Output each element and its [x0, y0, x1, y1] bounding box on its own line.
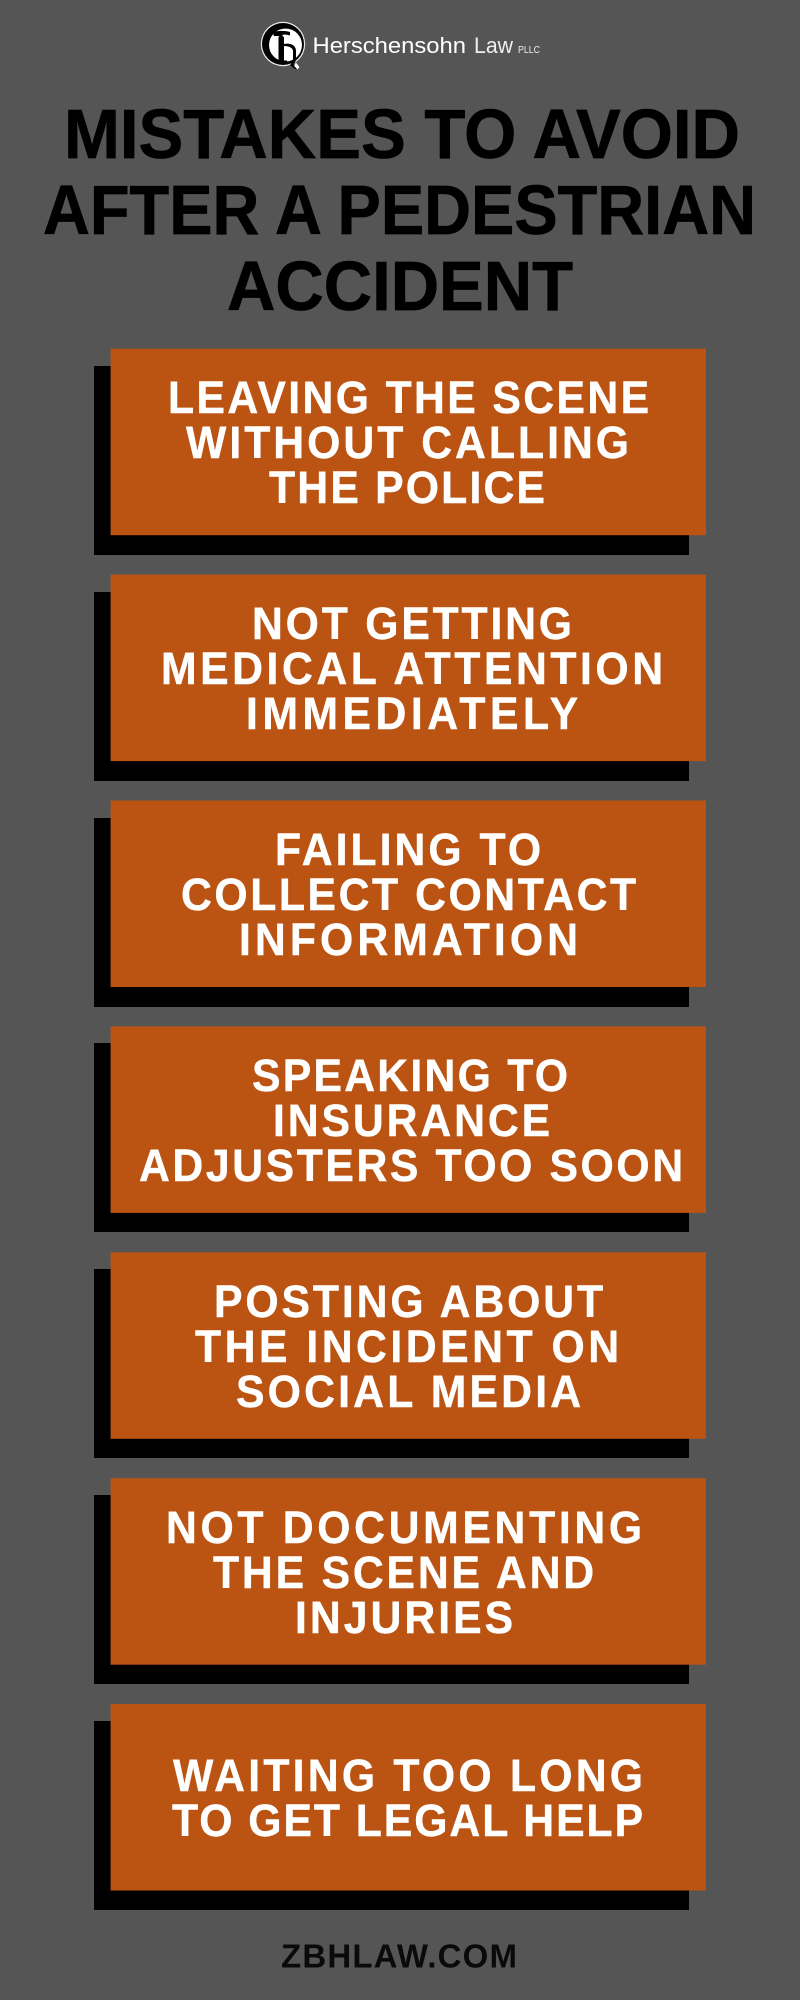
footer: website: ZBHLAW.COM: [281, 1938, 517, 1974]
panel text: INJURIES: [295, 1593, 513, 1643]
panel text: IMMEDIATELY: [246, 689, 578, 739]
panel text: FAILING TO: [275, 825, 541, 875]
panel text: NOT GETTING: [252, 599, 572, 649]
panel box: [111, 1026, 706, 1213]
panel text: SOCIAL MEDIA: [236, 1367, 581, 1417]
panel text: NOT DOCUMENTING: [166, 1503, 642, 1553]
panel text: [166, 1503, 642, 1643]
panel text: POSTING ABOUT: [214, 1277, 603, 1327]
panel box: [111, 575, 706, 761]
panel: mistake 6: [94, 1478, 706, 1684]
panel text: COLLECT CONTACT: [181, 870, 636, 920]
panel text: [181, 825, 636, 965]
panel text: [139, 1051, 683, 1191]
panel box: [111, 800, 706, 987]
panel box: [111, 1704, 706, 1890]
panel shadow: [94, 1269, 689, 1458]
panel: mistake 5: [94, 1252, 706, 1458]
panel shadow: [94, 1495, 689, 1684]
panel text: THE INCIDENT ON: [195, 1322, 619, 1372]
firm suffix: PLLC: [518, 45, 540, 56]
panel text: WITHOUT CALLING: [186, 418, 629, 468]
logo: Herschensohn Law PLLC: [261, 22, 540, 69]
title: MISTAKES TO AVOID: [64, 95, 740, 173]
panel text: [172, 1751, 643, 1846]
panel text: MEDICAL ATTENTION: [161, 644, 663, 694]
firm name: Herschensohn: [312, 33, 466, 58]
panel shadow: [94, 818, 689, 1007]
panel text: ADJUSTERS TOO SOON: [139, 1141, 683, 1191]
panel text: TO GET LEGAL HELP: [172, 1796, 643, 1846]
title: AFTER A PEDESTRIAN: [43, 171, 756, 249]
panel: mistake 4: [94, 1026, 706, 1232]
panel text: INFORMATION: [239, 915, 578, 965]
panel shadow: [94, 366, 689, 555]
panel text: [168, 373, 649, 513]
panel text: LEAVING THE SCENE: [168, 373, 649, 423]
panel text: INSURANCE: [273, 1096, 550, 1146]
panel text: [195, 1277, 619, 1417]
panel text: WAITING TOO LONG: [173, 1751, 643, 1801]
panel: mistake 1: [94, 349, 706, 555]
title: ACCIDENT: [227, 247, 573, 325]
panel box: [111, 1252, 706, 1439]
panel shadow: [94, 1721, 689, 1910]
panel shadow: [94, 1043, 689, 1232]
panel text: THE POLICE: [269, 463, 545, 513]
panel: mistake 3: [94, 800, 706, 1007]
panel shadow: [94, 592, 689, 781]
panel text: [161, 599, 663, 739]
panel box: [111, 349, 706, 535]
panel: mistake 7: [94, 1704, 706, 1910]
panel text: SPEAKING TO: [252, 1051, 568, 1101]
panel box: [111, 1478, 706, 1665]
firm name: Law: Law: [474, 33, 513, 58]
panel text: THE SCENE AND: [213, 1548, 594, 1598]
panel: mistake 2: [94, 575, 706, 781]
icon: firm emblem: [261, 22, 305, 69]
title: [43, 95, 756, 325]
